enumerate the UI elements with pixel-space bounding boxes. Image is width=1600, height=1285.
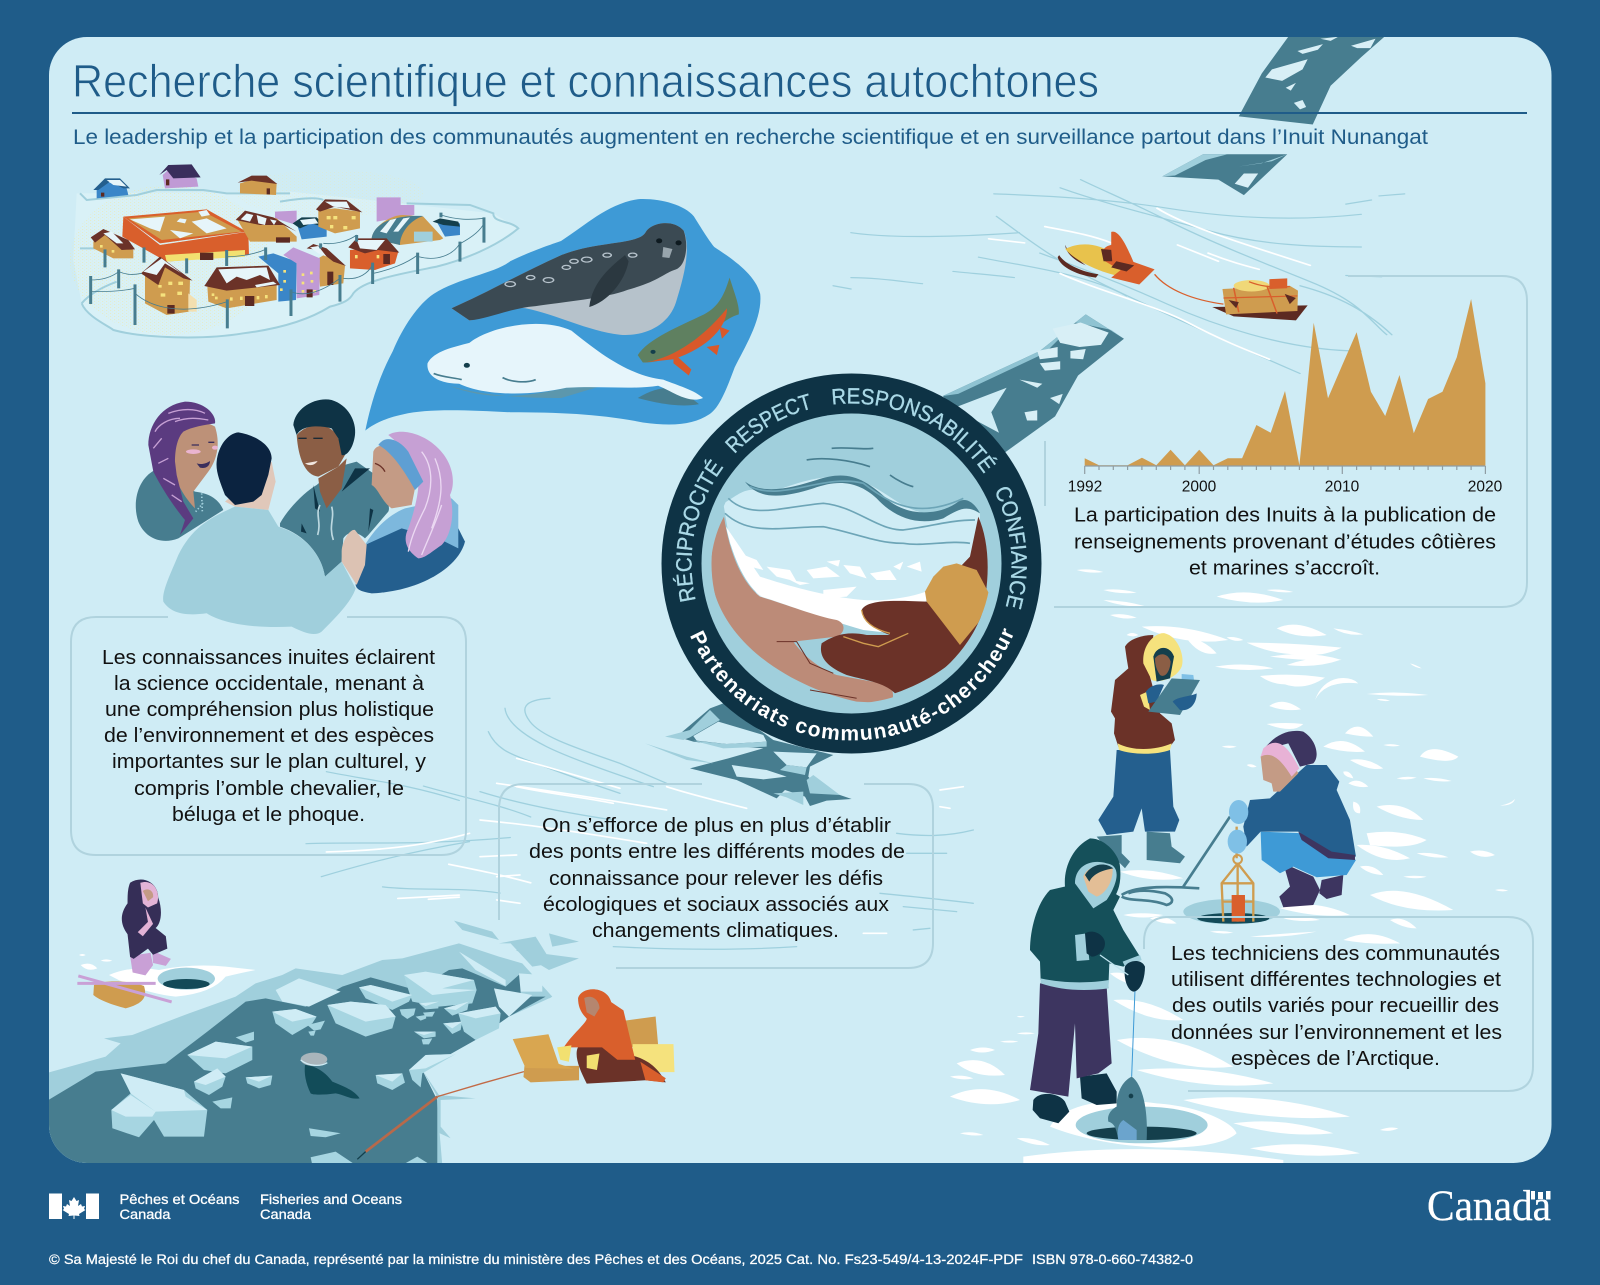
thought bubble with animals [365, 199, 760, 431]
windows and doors [100, 216, 379, 301]
standing person with clipboard [1097, 633, 1200, 868]
boots [1033, 1073, 1117, 1123]
trousers [1030, 983, 1112, 1097]
jacket [1030, 880, 1140, 988]
copyright line [49, 1252, 1193, 1267]
crouching technician with sampling cage [1122, 731, 1356, 924]
text: bridges between knowledge: changements climatiques. [592, 919, 839, 942]
coloured row [258, 253, 297, 302]
text: chart caption: renseignements provenant d’études côtières [1074, 530, 1496, 554]
land ice [424, 998, 550, 1106]
gold wide house [207, 285, 277, 308]
title rule [72, 112, 1527, 114]
text: community knowledge: de l’environnement et des espèces [104, 724, 434, 747]
text: community knowledge: Les connaissances inuites éclairent [102, 646, 435, 669]
snow ground [73, 192, 518, 337]
lower left ice and water [49, 920, 579, 1163]
kneeling researcher with case [513, 989, 674, 1084]
village [70, 164, 518, 337]
text: community technicians: données sur l’environnement et les [1171, 1021, 1502, 1044]
ice floe below ring [645, 703, 852, 806]
tow rope [1155, 274, 1223, 304]
reciprocite: RÉCIPROCITÉ [672, 459, 724, 602]
text box outline: community knowledge [71, 617, 466, 855]
text: community technicians [1171, 942, 1502, 1070]
wires and poles [91, 215, 484, 309]
seal in water [301, 1053, 360, 1099]
purple back blocks [275, 197, 414, 225]
copyright line: Cat. No. Fs23-549/4-13-2024F-PDF [786, 1252, 1023, 1267]
text: chart caption: et marines s’accroît. [1189, 556, 1380, 580]
cargo sled [1212, 278, 1308, 320]
mittens [1229, 800, 1248, 824]
hall with arched roof [236, 216, 297, 242]
gold tall house [145, 267, 190, 315]
far houses [97, 182, 128, 198]
woman with lilac hair [356, 432, 465, 593]
icon: Canadian flag [49, 1194, 99, 1219]
ice floe under subtitle [1162, 154, 1287, 195]
respect: RESPECT [724, 394, 809, 454]
small person by ice hole [77, 954, 256, 1008]
axis labels: 1992 [1068, 478, 1102, 496]
text box outline: bridges [499, 784, 933, 968]
big orange building [122, 217, 249, 262]
text: community technicians: espèces de l’Arctique. [1231, 1047, 1440, 1070]
sampling cage [1222, 827, 1253, 922]
axis labels: 2020 [1468, 478, 1503, 496]
sled tracks [833, 180, 1405, 374]
partnership ring [662, 374, 1042, 754]
icon: arctic char [638, 278, 739, 376]
jacket [1243, 765, 1356, 857]
text: community technicians: utilisent différentes technologies et [1171, 968, 1501, 991]
text: bridges between knowledge: connaissance pour relever les défis [549, 867, 883, 890]
axis labels: 2010 [1325, 478, 1360, 496]
ice floe top right [1239, 35, 1387, 125]
snowmobile [1058, 232, 1155, 285]
ring words [672, 388, 1027, 610]
boots [1279, 863, 1343, 907]
text: community knowledge: compris l’omble chevalier, le [134, 777, 404, 800]
text: community technicians: des outils variés pour recueillir des [1172, 994, 1499, 1017]
hands illustration [700, 420, 1000, 720]
department name: Canada [120, 1206, 171, 1222]
cuffs and mitts [1075, 933, 1142, 967]
fish [1108, 1077, 1147, 1140]
ice chunks top faces [111, 972, 501, 1117]
ice hole [1183, 899, 1280, 924]
department name: Pêches et Océans [120, 1191, 240, 1207]
blue house [298, 224, 327, 240]
head [1261, 753, 1298, 792]
shelf and shard faces [459, 952, 542, 1017]
cable [437, 1072, 524, 1097]
man in green hoodie [280, 399, 389, 577]
hood [1065, 838, 1120, 907]
text: community knowledge [102, 646, 435, 826]
snow around hole [79, 954, 256, 997]
ring caption: Partenariats communauté-chercheur [690, 628, 1013, 740]
rope [1122, 817, 1230, 905]
text: bridges between knowledge: des ponts entre les différents modes de [529, 840, 905, 863]
department name: Fisheries and Oceans [260, 1191, 402, 1207]
copyright line: ISBN 978-0-660-74382-0 [1032, 1252, 1193, 1267]
text: community technicians: Les techniciens des communautés [1171, 942, 1500, 965]
icon: beluga [427, 324, 703, 405]
responsabilite: RESPONSABILITÉ [832, 388, 998, 474]
text: community knowledge: importantes sur le plan culturel, y [112, 750, 427, 773]
person fishing through ice [1030, 838, 1208, 1143]
icon: seal [452, 223, 687, 335]
text box outline: technicians [1144, 917, 1533, 1091]
text: community knowledge: la science occidentale, menant à [114, 672, 425, 695]
subtitle: Le leadership et la participation des communautés augmentent en recherche scientifique et en surveillance partout dans l’Inuit Nunangat [73, 126, 1428, 149]
copyright line: © Sa Majesté le Roi du chef du Canada, représenté par la ministre du ministère des Pêches et des Océans, 2025 [49, 1252, 782, 1267]
department name [120, 1191, 402, 1222]
ice chunks side faces [111, 972, 501, 1165]
text: chart caption: La participation des Inuits à la publication de [1074, 504, 1496, 526]
quonset [372, 215, 443, 245]
small left house [93, 233, 133, 258]
department name: Canada [260, 1206, 311, 1222]
person seen from behind [163, 432, 367, 634]
trousers [1261, 832, 1356, 877]
text: bridges between knowledge: écologiques et sociaux associés aux [543, 893, 890, 916]
ring light band [702, 414, 1002, 714]
gold two storey [318, 208, 360, 233]
text: community knowledge: béluga et le phoque. [172, 803, 365, 826]
text: bridges between knowledge: On s’efforce de plus en plus d’établir [542, 814, 891, 837]
open water [46, 968, 546, 1167]
axis labels [1068, 478, 1503, 496]
ice crack lines and streaks [480, 698, 973, 949]
footer: government signature [49, 1191, 402, 1222]
axis labels: 2000 [1182, 478, 1217, 496]
text: bridges between knowledge [529, 814, 905, 942]
ice floe upper right of ring [943, 314, 1124, 461]
Canada wordmark: Canada [1427, 1183, 1551, 1230]
title: Recherche scientifique et connaissances autochtones [72, 55, 1099, 107]
woman with purple braid [136, 402, 223, 541]
ring outer [662, 374, 1042, 754]
ice shelf [46, 943, 552, 1167]
ice shards [454, 921, 579, 970]
fish line [1132, 990, 1135, 1077]
text box outline: chart [1045, 276, 1527, 607]
bag [93, 981, 145, 1008]
snowmobile and sled [1058, 232, 1308, 320]
area chart: Inuit participation 1992-2020 [1068, 299, 1503, 496]
fishing hole [1076, 1107, 1208, 1143]
group of four people talking [136, 399, 465, 634]
orange house [350, 248, 398, 270]
snow patches around the technicians [1077, 569, 1515, 917]
text: chart caption [1074, 504, 1496, 580]
confiance: CONFIANCE [996, 487, 1027, 610]
text: community knowledge: une compréhension plus holistique [105, 698, 434, 721]
